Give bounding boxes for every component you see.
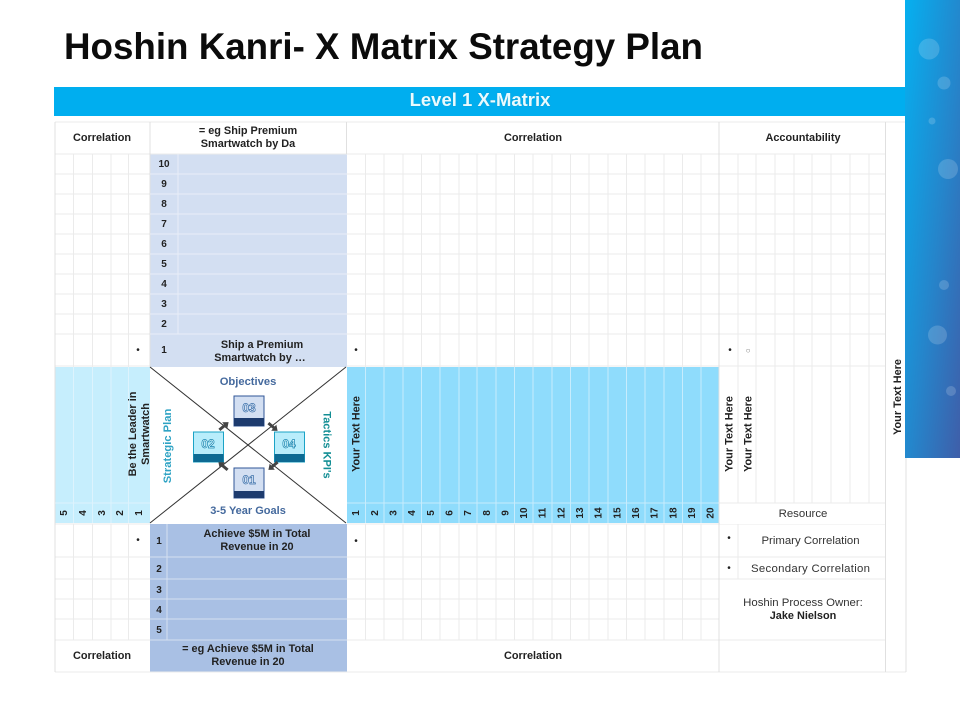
top row numbers: 5 [161,259,167,270]
bottom rows: • [136,535,140,546]
top row numbers: 9 [161,179,167,190]
bottom labels: Correlation [504,650,562,662]
middle numbers 1 to 20: 19 [687,507,698,519]
title: Hoshin Kanri- X Matrix Strategy Plan [64,26,703,67]
middle numbers 1 to 20: 16 [631,507,642,519]
bottom rows: Achieve $5M in Total [204,528,310,540]
header row labels: Correlation [73,132,131,144]
header row labels [73,125,841,150]
left numbers: 2 [115,510,126,516]
correlation dots top: • [354,345,358,356]
correlation dots top: • [136,345,140,356]
left numbers: 4 [78,510,89,516]
box 04 [274,432,304,462]
right column labels: Your Text Here [724,396,736,472]
correlation dots top [136,345,751,356]
middle numbers 1 to 20: 20 [706,507,716,519]
bottom rows [136,528,358,636]
legend panel [720,504,885,622]
top row numbers: 8 [161,199,167,210]
header row labels: Accountability [765,132,841,144]
tactics label: Tactics KPI's [320,411,332,479]
left band labels [127,392,152,476]
left band labels: Smartwatch [140,403,152,465]
legend panel: • [727,533,731,544]
sidebar with bubbles [905,0,960,458]
top row numbers: 10 [158,159,170,170]
left numbers: 1 [134,510,145,516]
bottom labels: Correlation [73,650,131,662]
box 01 [234,468,264,498]
top row 1 text: Smartwatch by … [214,352,306,364]
middle numbers 1 to 20: 2 [370,510,381,516]
legend panel: Secondary Correlation [751,563,870,575]
bottom rows: 2 [156,564,162,575]
middle numbers 1 to 20: 17 [650,507,660,519]
header row labels: Correlation [504,132,562,144]
top center fill [150,154,347,367]
bottom center fill [150,524,347,672]
middle band labels: Your Text Here [350,396,362,472]
middle numbers 1 to 20: 6 [444,510,456,516]
legend panel: Jake Nielson [770,610,836,622]
box 02: 02 [201,437,215,451]
middle numbers 1 to 20: 4 [407,510,418,516]
middle numbers 1 to 20: 10 [519,507,530,519]
legend panel: Resource [779,508,827,520]
bottom labels: = eg Achieve $5M in Total [182,643,314,655]
right column labels: Your Text Here [742,396,754,472]
right column labels [724,396,754,472]
X diagram [150,367,347,524]
far right label: Your Text Here [892,359,904,435]
objectives label: Objectives [220,376,276,388]
box 03: 03 [242,401,256,415]
middle numbers 1 to 20 [351,507,716,519]
bottom rows: 4 [156,605,162,616]
middle numbers 1 to 20: 9 [500,510,512,516]
arrows [216,419,280,473]
bottom labels [73,643,562,668]
bottom rows: 1 [156,536,162,547]
box 02 [194,432,224,462]
correlation dots top: ○ [746,346,751,355]
middle numbers 1 to 20: 7 [463,510,474,516]
middle numbers 1 to 20: 13 [575,507,586,519]
middle numbers 1 to 20: 5 [426,510,437,516]
left lightblue band [55,367,150,523]
box 03 [234,396,264,426]
bottom rows: • [354,536,358,547]
bottom rows: 3 [156,585,162,596]
banner: Level 1 X-Matrix [410,89,551,110]
middle numbers 1 to 20: 18 [668,507,680,519]
strategic plan label: Strategic Plan [162,409,174,483]
banner [54,87,905,116]
goals label: 3-5 Year Goals [210,505,286,517]
top row 1 text: Ship a Premium [221,339,303,351]
top row numbers: 6 [161,239,167,250]
middle numbers 1 to 20: 11 [538,507,548,518]
left numbers: 3 [97,510,108,516]
bottom rows: Revenue in 20 [220,541,294,553]
middle numbers 1 to 20: 3 [388,510,400,516]
bottom labels: Revenue in 20 [211,656,285,668]
left band labels: Be the Leader in [127,392,139,476]
legend panel: • [727,563,731,574]
bottom rows: 5 [156,625,162,636]
top row numbers: 7 [161,219,167,230]
middle numbers 1 to 20: 12 [556,507,568,519]
header row labels: = eg Ship Premium [199,125,297,137]
box 04: 04 [282,437,296,451]
legend panel: Primary Correlation [761,535,860,547]
middle band [347,367,719,523]
box 01: 01 [242,473,256,487]
legend panel: Hoshin Process Owner: [743,597,863,609]
header row labels: Smartwatch by Da [201,138,296,150]
top row numbers: 3 [161,299,167,310]
top row numbers [158,159,170,356]
top row numbers: 2 [161,319,167,330]
correlation dots top: • [728,345,732,356]
left numbers: 5 [59,510,70,516]
top row numbers: 1 [161,345,167,356]
middle numbers 1 to 20: 14 [594,507,604,519]
middle numbers 1 to 20: 15 [612,507,624,519]
top row 1 text [214,339,306,364]
left numbers [59,510,145,516]
middle numbers 1 to 20: 1 [351,510,362,516]
top row numbers: 4 [161,279,167,290]
middle numbers 1 to 20: 8 [482,510,493,516]
